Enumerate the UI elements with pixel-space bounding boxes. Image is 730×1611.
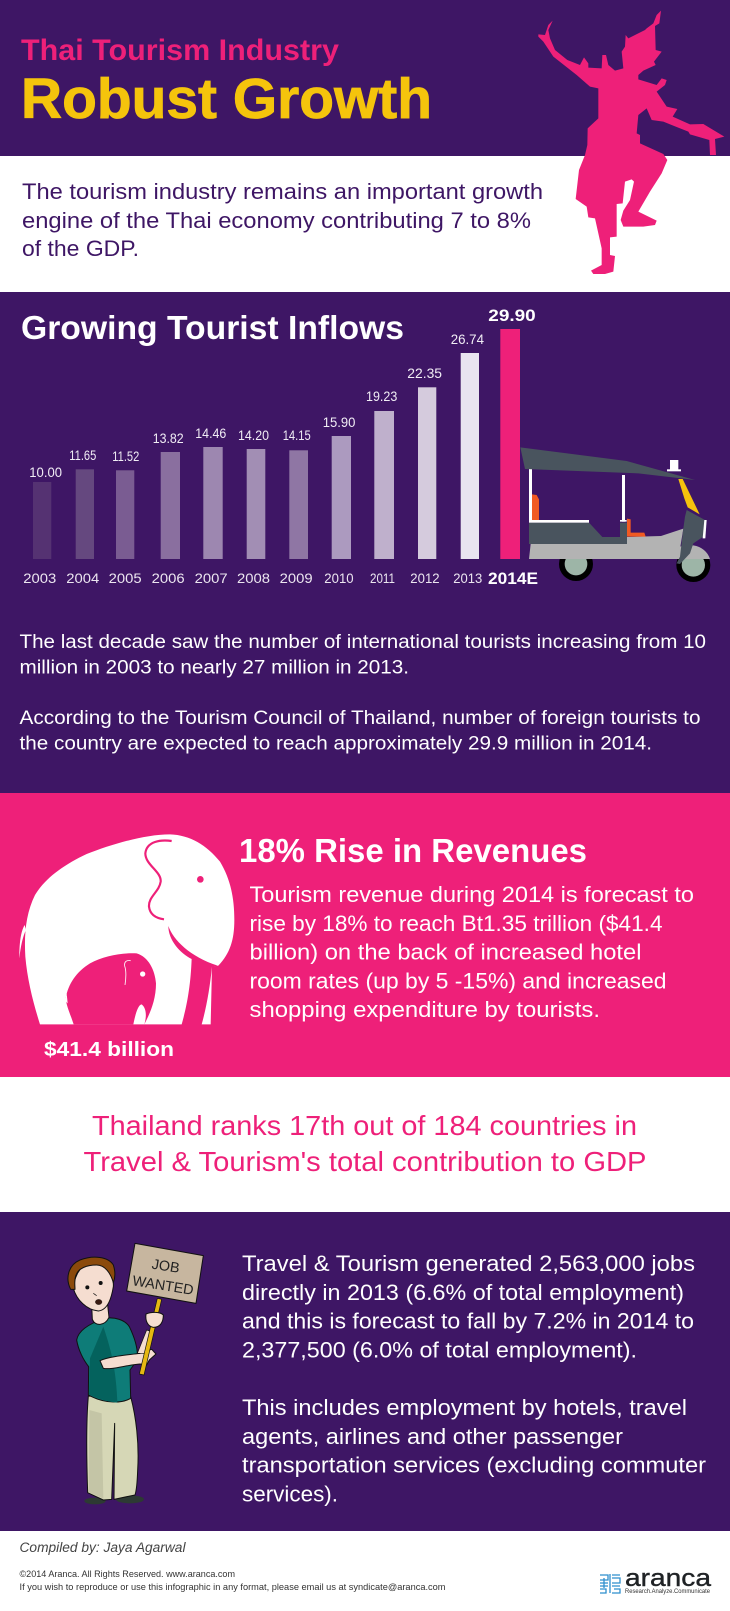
icon: man holding job wanted sign [68,1243,203,1504]
panel: intro: of the GDP. [22,236,139,261]
panel: intro: The tourism industry remains an important growth [22,179,543,204]
copyright notice: If you wish to reproduce or use this infographic in any format, please email us at syndicate@aranca.com [20,1582,446,1593]
icon: Thai dancer silhouette [538,11,724,274]
title: Robust Growth: Robust Growth [21,67,432,131]
text block: employment figures: Travel & Tourism generated 2,563,000 jobs [242,1251,695,1276]
icon: tuk-tuk [520,447,710,582]
panel: intro: engine of the Thai economy contributing 7 to 8% [22,208,531,233]
text block: revenue forecast [250,882,694,1022]
bar chart: tourist arrivals 2003 to 2014E: 26.74 [451,332,484,347]
bar chart: tourist arrivals 2003 to 2014E: 2005 [109,571,142,586]
panel: jobs [0,1212,730,1531]
bar chart: tourist arrivals 2003 to 2014E: 2009 [280,571,313,586]
bar chart: tourist arrivals 2003 to 2014E: 15.90 [323,415,355,430]
text block: employment figures [242,1251,706,1506]
bar chart: tourist arrivals 2003 to 2014E [23,306,538,588]
bar chart: tourist arrivals 2003 to 2014E: 2004 [66,571,100,586]
text block: employment figures: transportation services (excluding commuter [242,1452,706,1478]
panel: GDP rank callout: Travel & Tourism's total contribution to GDP [84,1146,646,1177]
bar chart: tourist arrivals 2003 to 2014E: 2010 [324,571,354,586]
front wheel [676,548,710,582]
panel: header [0,0,730,156]
bar chart: tourist arrivals 2003 to 2014E: 2007 [195,571,228,586]
bar chart: tourist arrivals 2003 to 2014E: 14.46 [195,426,226,441]
text block: employment figures: services). [242,1482,338,1506]
copyright notice [20,1569,446,1593]
sign: job wanted: JOB [151,1257,181,1277]
logo: aranca [600,1565,711,1595]
text block: employment figures: agents, airlines and other passenger [242,1424,623,1449]
panel: growing tourist inflows [0,292,730,793]
panel: footer [20,1540,711,1595]
bar chart: tourist arrivals 2003 to 2014E: 2013 [453,571,482,586]
bar chart: tourist arrivals 2003 to 2014E: 22.35 [407,366,442,381]
sign: job wanted [127,1243,203,1303]
bar chart: tourist arrivals 2003 to 2014E: 2008 [237,571,270,586]
title: Thai Tourism Industry: Thai Tourism Industry [21,34,339,67]
bar chart: tourist arrivals 2003 to 2014E: 2006 [152,571,185,586]
bar chart: tourist arrivals 2003 to 2014E: 2003 [23,571,56,586]
heading: 18% Rise in Revenues: 18% Rise in Revenues [239,832,587,869]
text block: tourist inflow commentary [20,632,706,754]
text block: revenue forecast: rise by 18% to reach Bt1.35 trillion ($41.4 [250,911,662,936]
bar chart: tourist arrivals 2003 to 2014E: 14.15 [283,428,311,443]
bar chart: tourist arrivals 2003 to 2014E: 29.90 [488,306,536,325]
text block: employment figures: and this is forecast to fall by 7.2% in 2014 to [242,1308,694,1334]
text block: employment figures: 2,377,500 (6.0% of total employment). [242,1338,637,1362]
bar chart: tourist arrivals 2003 to 2014E: 11.65 [69,448,96,463]
sign: job wanted: WANTED [131,1273,195,1299]
heading: Growing Tourist Inflows: Growing Tourist Inflows [21,309,404,346]
copyright notice: ©2014 Aranca. All Rights Reserved. www.aranca.com [20,1569,235,1580]
logo: aranca: aranca [625,1565,711,1592]
text block: revenue forecast: shopping expenditure by tourists. [250,997,600,1022]
text block: employment figures: This includes employment by hotels, travel [242,1395,687,1420]
text block: revenue forecast: Tourism revenue during 2014 is forecast to [250,882,694,907]
bar chart: tourist arrivals 2003 to 2014E: 11.52 [112,449,139,464]
text block: tourist inflow commentary: the country are expected to reach approximately 29.9 million in 2014. [20,734,652,754]
label: $41.4 billion: $41.4 billion [44,1038,174,1061]
bar chart: tourist arrivals 2003 to 2014E: 2011 [370,571,395,586]
bar chart: tourist arrivals 2003 to 2014E: 13.82 [153,431,184,446]
text block: revenue forecast: billion) on the back of increased hotel [250,940,642,964]
text block: tourist inflow commentary: million in 2003 to nearly 27 million in 2013. [20,658,409,678]
bar chart: tourist arrivals 2003 to 2014E: 14.20 [238,428,269,443]
bar chart: tourist arrivals 2003 to 2014E: 2014E [488,569,538,588]
icon: elephant and calf [19,834,234,1024]
panel: GDP rank callout: Thailand ranks 17th out of 184 countries in [92,1110,637,1141]
rear wheel [559,547,593,581]
bar chart: tourist arrivals 2003 to 2014E: 10.00 [29,465,62,480]
credit: compiler: Compiled by: Jaya Agarwal [20,1540,187,1555]
shoes [84,1495,144,1504]
text block: revenue forecast: room rates (up by 5 -15%) and increased [250,968,666,994]
panel: revenue [0,793,730,1077]
text block: tourist inflow commentary: The last decade saw the number of international tourists increasing from 10 [20,632,706,653]
panel: intro [0,156,730,292]
text block: tourist inflow commentary: According to the Tourism Council of Thailand, number of foreign tourists to [20,708,700,729]
text block: employment figures: directly in 2013 (6.6% of total employment) [242,1280,684,1305]
logo: aranca: Research.Analyze.Communicate [625,1588,710,1595]
bar chart: tourist arrivals 2003 to 2014E: 2012 [410,571,440,586]
panel: GDP rank callout [0,1077,730,1212]
bar chart: tourist arrivals 2003 to 2014E: 19.23 [366,389,397,404]
